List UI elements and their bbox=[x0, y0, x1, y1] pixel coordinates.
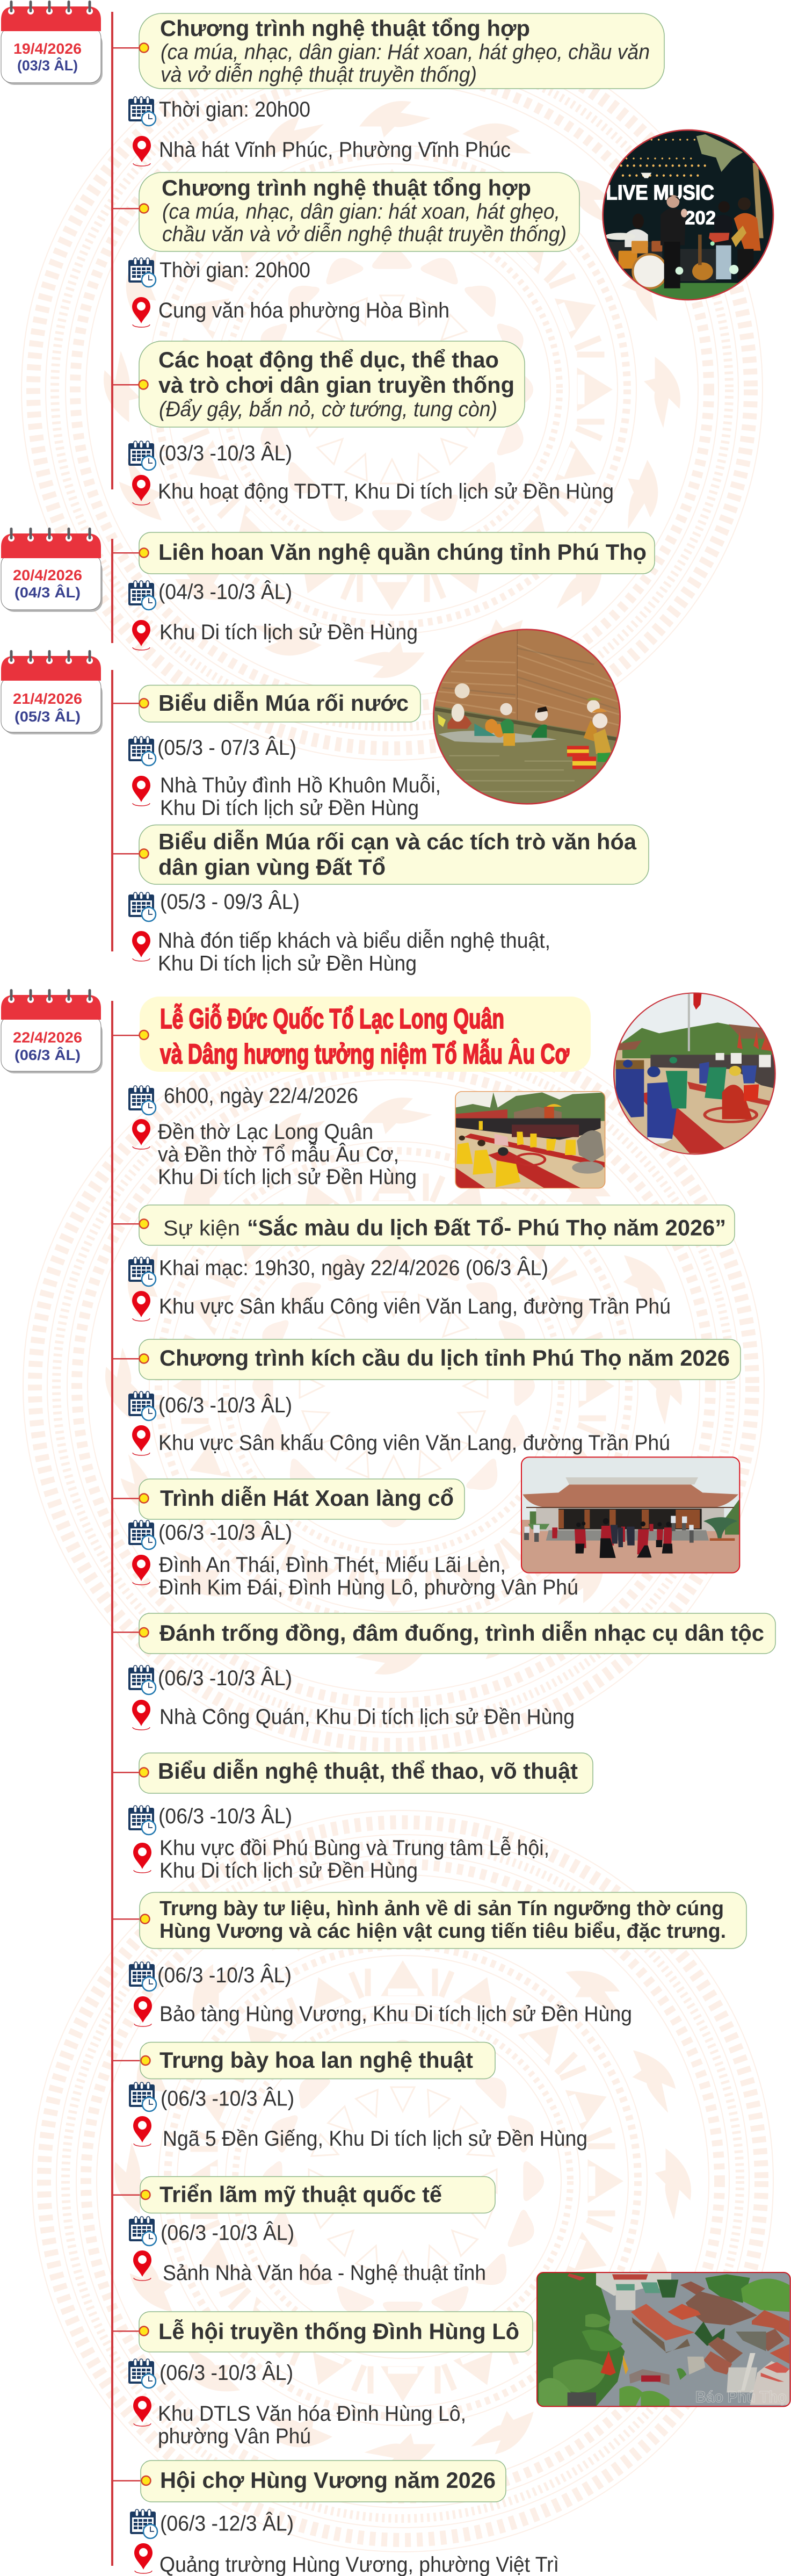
date row bbox=[128, 580, 292, 610]
event: Biểu diễn Múa rối cạn bbox=[113, 825, 649, 884]
photo: ceremony rectangle bbox=[455, 1092, 605, 1188]
calendar badge 21/4: (05/3 ÂL) bbox=[14, 708, 81, 725]
date/time row bbox=[128, 1084, 358, 1115]
drummer bbox=[633, 214, 644, 229]
section: 22/4/2026 bbox=[1, 989, 790, 2576]
event: Trưng bày tư liệu bbox=[113, 1892, 746, 1949]
calendar badge 20/4: (04/3 ÂL) bbox=[14, 584, 81, 601]
date row: (04/3 -10/3 ÂL) bbox=[158, 580, 292, 604]
date row: (06/3 -10/3 ÂL) bbox=[161, 2087, 294, 2110]
calendar badge 21/4 bbox=[1, 650, 103, 734]
location row: Đình An Thái, Đình Thét, Miếu Lãi Lèn, bbox=[159, 1553, 506, 1577]
date row: (06/3 -10/3 ÂL) bbox=[158, 1805, 292, 1828]
time row: Thời gian: 20h00 bbox=[159, 98, 310, 121]
location row: Khu vực Sân khấu Công viên Văn Lang, đường Trần Phú bbox=[158, 1431, 670, 1455]
event: Triển lãm mỹ thuật quốc tế bbox=[113, 2177, 495, 2213]
location row bbox=[132, 297, 449, 327]
timeline line bbox=[111, 539, 113, 643]
location row bbox=[132, 1553, 578, 1599]
date row: (05/3 - 07/3 ÂL) bbox=[157, 736, 296, 760]
photo: water puppets circle bbox=[431, 627, 623, 806]
event: Chương trình kích cầu du lịch bbox=[113, 1339, 741, 1380]
event: Hội chợ Hùng Vương năm 2026 bbox=[113, 2460, 506, 2502]
event: Chương trình nghệ thuật tổng hợp, Vĩnh Phúc: (ca múa, nhạc, dân gian: Hát xoan, hát ghẹo, chầu văn bbox=[161, 40, 650, 64]
guitar bbox=[692, 262, 713, 280]
date row bbox=[129, 2217, 294, 2246]
location row: Khu DTLS Văn hóa Đình Hùng Lô, bbox=[158, 2402, 466, 2426]
date row: (06/3 -12/3 ÂL) bbox=[160, 2512, 294, 2536]
section: 20/4/2026 bbox=[1, 528, 655, 650]
location row bbox=[134, 2543, 559, 2576]
event: Biểu diễn nghệ thuật, thể thao, võ thuật: Biểu diễn nghệ thuật, thể thao, võ thuật bbox=[158, 1758, 578, 1784]
event: Chương trình nghệ thuật tổng hợp, Hòa Bình: Chương trình nghệ thuật tổng hợp bbox=[162, 175, 531, 200]
location row: và Đền thờ Tổ mẫu Âu Cơ, bbox=[158, 1143, 399, 1166]
location row: Khu Di tích lịch sử Đền Hùng bbox=[160, 796, 419, 820]
calendar badge 21/4: 21/4/2026 bbox=[13, 690, 82, 707]
date row: (06/3 -10/3 ÂL) bbox=[157, 1964, 292, 1987]
location row bbox=[133, 2250, 486, 2285]
photo: live music circle: LIVE MUSIC bbox=[606, 181, 714, 205]
event: Biểu diễn Múa rối nước bbox=[113, 686, 420, 722]
calendar badge 22/4 bbox=[1, 989, 103, 1073]
singer bbox=[661, 208, 686, 246]
date row bbox=[128, 1520, 292, 1549]
location row: Đình Kim Đái, Đình Hùng Lô, phường Vân Phú bbox=[159, 1576, 578, 1599]
calendar badge 20/4 bbox=[1, 528, 103, 612]
date row: (06/3 -10/3 ÂL) bbox=[159, 2361, 293, 2385]
photo: rite circle bbox=[612, 992, 779, 1157]
date row bbox=[128, 890, 300, 921]
date row bbox=[128, 2359, 293, 2388]
time row bbox=[128, 258, 310, 287]
calendar badge 20/4: 20/4/2026 bbox=[13, 567, 82, 583]
date row: (06/3 -10/3 ÂL) bbox=[158, 1666, 292, 1690]
event: Chương trình nghệ thuật tổng hợp, Hòa Bình: chầu văn và vở diễn nghệ thuật truyền thống) bbox=[162, 222, 567, 246]
event: Chương trình nghệ thuật tổng hợp, Vĩnh Phúc bbox=[113, 13, 664, 89]
location row: Bảo tàng Hùng Vương, Khu Di tích lịch sử Đền Hùng bbox=[159, 2002, 632, 2026]
event: Chương trình nghệ thuật tổng hợp, Vĩnh Phúc: Chương trình nghệ thuật tổng hợp bbox=[160, 16, 530, 41]
location row: Khu vực Sân khấu Công viên Văn Lang, đường Trần Phú bbox=[159, 1295, 671, 1318]
puppets bbox=[447, 713, 471, 729]
event: Sự kiện Sắc màu du lịch Đất Tổ: “Sắc màu du lịch Đất Tổ- Phú Thọ năm 2026” bbox=[247, 1214, 726, 1240]
event: Trình diễn Hát Xoan làng cổ: Trình diễn Hát Xoan làng cổ bbox=[160, 1485, 454, 1511]
event: Lễ hội truyền thống Đình Hùng Lô: Lễ hội truyền thống Đình Hùng Lô bbox=[158, 2318, 519, 2344]
photo: Hát Xoan temple bbox=[521, 1457, 739, 1573]
date row bbox=[128, 441, 292, 470]
calendar badge 19/4 bbox=[1, 1, 103, 85]
calendar badge 22/4: (06/3 ÂL) bbox=[14, 1047, 81, 1063]
photo: Đình Hùng Lô aerial bbox=[537, 2272, 790, 2406]
date row bbox=[129, 1962, 292, 1991]
section: 21/4/2026 bbox=[1, 627, 649, 976]
event: Đánh trống đồng bbox=[113, 1613, 775, 1654]
location row: Khu hoạt động TDTT, Khu Di tích lịch sử Đền Hùng bbox=[158, 480, 614, 503]
event: Lễ hội truyền thống Đình Hùng Lô bbox=[113, 2312, 533, 2352]
event: Trưng bày hoa lan nghệ thuật bbox=[113, 2043, 495, 2079]
time row: Thời gian: 20h00 bbox=[159, 258, 310, 282]
location row bbox=[133, 2116, 587, 2151]
date row: (06/3 -10/3 ÂL) bbox=[161, 2221, 294, 2245]
location row: Khu Di tích lịch sử Đền Hùng bbox=[158, 952, 417, 976]
event: Đánh trống đồng: Đánh trống đồng, đâm đuống, trình diễn nhạc cụ dân tộc bbox=[159, 1620, 764, 1646]
location row: Khu vực đồi Phú Bùng và Trung tâm Lễ hội, bbox=[159, 1836, 549, 1860]
calendar badge 22/4: 22/4/2026 bbox=[13, 1029, 82, 1045]
event: Trưng bày tư liệu: Trưng bày tư liệu, hình ảnh về di sản Tín ngưỡng thờ cúng bbox=[159, 1897, 724, 1920]
guitarists bbox=[714, 222, 715, 225]
location row: Ngã 5 Đền Giếng, Khu Di tích lịch sử Đền Hùng bbox=[163, 2127, 587, 2151]
event: Liên hoan Văn nghệ quần chúng bbox=[113, 532, 655, 574]
event: Trưng bày tư liệu: Hùng Vương và các hiện vật cung tiến tiêu biểu, đặc trưng. bbox=[159, 1920, 726, 1943]
location row bbox=[132, 774, 441, 820]
date row bbox=[130, 2509, 294, 2538]
location row: Khu Di tích lịch sử Đền Hùng bbox=[159, 1859, 418, 1882]
event: Triển lãm mỹ thuật quốc tế: Triển lãm mỹ thuật quốc tế bbox=[159, 2182, 442, 2207]
event: Trình diễn Hát Xoan làng cổ bbox=[113, 1479, 465, 1519]
event: Biểu diễn Múa rối nước: Biểu diễn Múa rối nước bbox=[158, 690, 409, 716]
date row bbox=[128, 1391, 292, 1420]
event: Lễ Giỗ Đức Quốc Tổ Lạc Long Quân bbox=[113, 997, 591, 1072]
event: Chương trình nghệ thuật tổng hợp, Hòa Bình: (ca múa, nhạc, dân gian: hát xoan, hát ghẹo, bbox=[162, 200, 560, 223]
timeline line bbox=[111, 12, 113, 489]
location row: Nhà đón tiếp khách và biểu diễn nghệ thuật, bbox=[158, 929, 550, 953]
event: Biểu diễn nghệ thuật, thể thao, võ thuật bbox=[113, 1753, 593, 1793]
event: Biểu diễn Múa rối cạn: Biểu diễn Múa rối cạn và các tích trò văn hóa bbox=[158, 828, 637, 854]
date row bbox=[129, 2082, 294, 2111]
timeline line bbox=[111, 1001, 113, 2566]
event: Các hoạt động thể dục, thể thao: và trò chơi dân gian truyền thống bbox=[158, 372, 514, 398]
date row bbox=[128, 1805, 292, 1835]
location row: Khu Di tích lịch sử Đền Hùng bbox=[158, 1165, 417, 1189]
location row: Nhà Thủy đình Hồ Khuôn Muỗi, bbox=[160, 774, 441, 797]
date row bbox=[128, 736, 296, 766]
date/time row: 6h00, ngày 22/4/2026 bbox=[164, 1084, 358, 1108]
event: Các hoạt động thể dục, thể thao: Các hoạt động thể dục, thể thao bbox=[158, 347, 499, 372]
location row: Nhà hát Vĩnh Phúc, Phường Vĩnh Phúc bbox=[159, 138, 511, 162]
event: Chương trình kích cầu du lịch: Chương trình kích cầu du lịch tỉnh Phú Thọ năm 2026 bbox=[159, 1345, 730, 1370]
date row: (05/3 - 09/3 ÂL) bbox=[160, 890, 300, 914]
location row: Nhà Công Quán, Khu Di tích lịch sử Đền Hùng bbox=[159, 1705, 575, 1729]
event: Các hoạt động thể dục, thể thao: (Đẩy gậy, bắn nỏ, cờ tướng, tung còn) bbox=[159, 398, 497, 421]
location row: phường Vân Phú bbox=[158, 2425, 311, 2448]
calendar badge 19/4: 19/4/2026 bbox=[13, 40, 82, 57]
event: Biểu diễn Múa rối cạn: dân gian vùng Đất Tổ bbox=[158, 854, 386, 880]
timeline line bbox=[111, 670, 113, 951]
section: 19/4/2026 bbox=[1, 1, 775, 505]
date row bbox=[128, 1665, 292, 1694]
date row: (03/3 -10/3 ÂL) bbox=[158, 442, 292, 465]
time row bbox=[128, 97, 310, 126]
event: Chương trình nghệ thuật tổng hợp, Vĩnh Phúc: và vở diễn nghệ thuật truyền thống) bbox=[161, 63, 477, 86]
event: Các hoạt động thể dục, thể thao bbox=[113, 341, 525, 427]
location row bbox=[133, 2396, 466, 2448]
event: Trưng bày hoa lan nghệ thuật: Trưng bày hoa lan nghệ thuật bbox=[159, 2047, 473, 2073]
location row: Sảnh Nhà Văn hóa - Nghệ thuật tỉnh bbox=[163, 2261, 486, 2285]
location row: Khu Di tích lịch sử Đền Hùng bbox=[159, 620, 418, 644]
location row: Đền thờ Lạc Long Quân bbox=[158, 1120, 373, 1144]
location row bbox=[132, 1119, 417, 1189]
event: Lễ Giỗ Đức Quốc Tổ Lạc Long Quân: và Dâng hương tưởng niệm Tổ Mẫu Âu Cơ bbox=[160, 1038, 569, 1070]
location row bbox=[133, 1836, 549, 1882]
photo: live music circle bbox=[601, 129, 775, 301]
date row: (06/3 -10/3 ÂL) bbox=[158, 1394, 292, 1417]
event: Liên hoan Văn nghệ quần chúng: Liên hoan Văn nghệ quần chúng tỉnh Phú Thọ bbox=[158, 539, 647, 565]
location row bbox=[132, 620, 418, 650]
location row bbox=[132, 929, 550, 976]
location row: Cung văn hóa phường Hòa Bình bbox=[158, 299, 449, 322]
calendar badge 19/4: (03/3 ÂL) bbox=[17, 57, 78, 74]
event: Sự kiện Sắc màu du lịch Đất Tổ bbox=[113, 1205, 735, 1245]
event: Sự kiện Sắc màu du lịch Đất Tổ: Sự kiện bbox=[163, 1216, 240, 1240]
date row: Khai mạc: 19h30, ngày 22/4/2026 (06/3 ÂL) bbox=[159, 1256, 548, 1280]
date row: (06/3 -10/3 ÂL) bbox=[158, 1521, 292, 1545]
event: Lễ Giỗ Đức Quốc Tổ Lạc Long Quân: Lễ Giỗ Đức Quốc Tổ Lạc Long Quân bbox=[160, 1004, 504, 1035]
location row: Quảng trường Hùng Vương, phường Việt Trì bbox=[159, 2553, 559, 2576]
event: Hội chợ Hùng Vương năm 2026: Hội chợ Hùng Vương năm 2026 bbox=[160, 2467, 496, 2493]
photo: live music circle: 202 bbox=[685, 208, 716, 229]
event: Chương trình nghệ thuật tổng hợp, Hòa Bình bbox=[113, 172, 579, 251]
